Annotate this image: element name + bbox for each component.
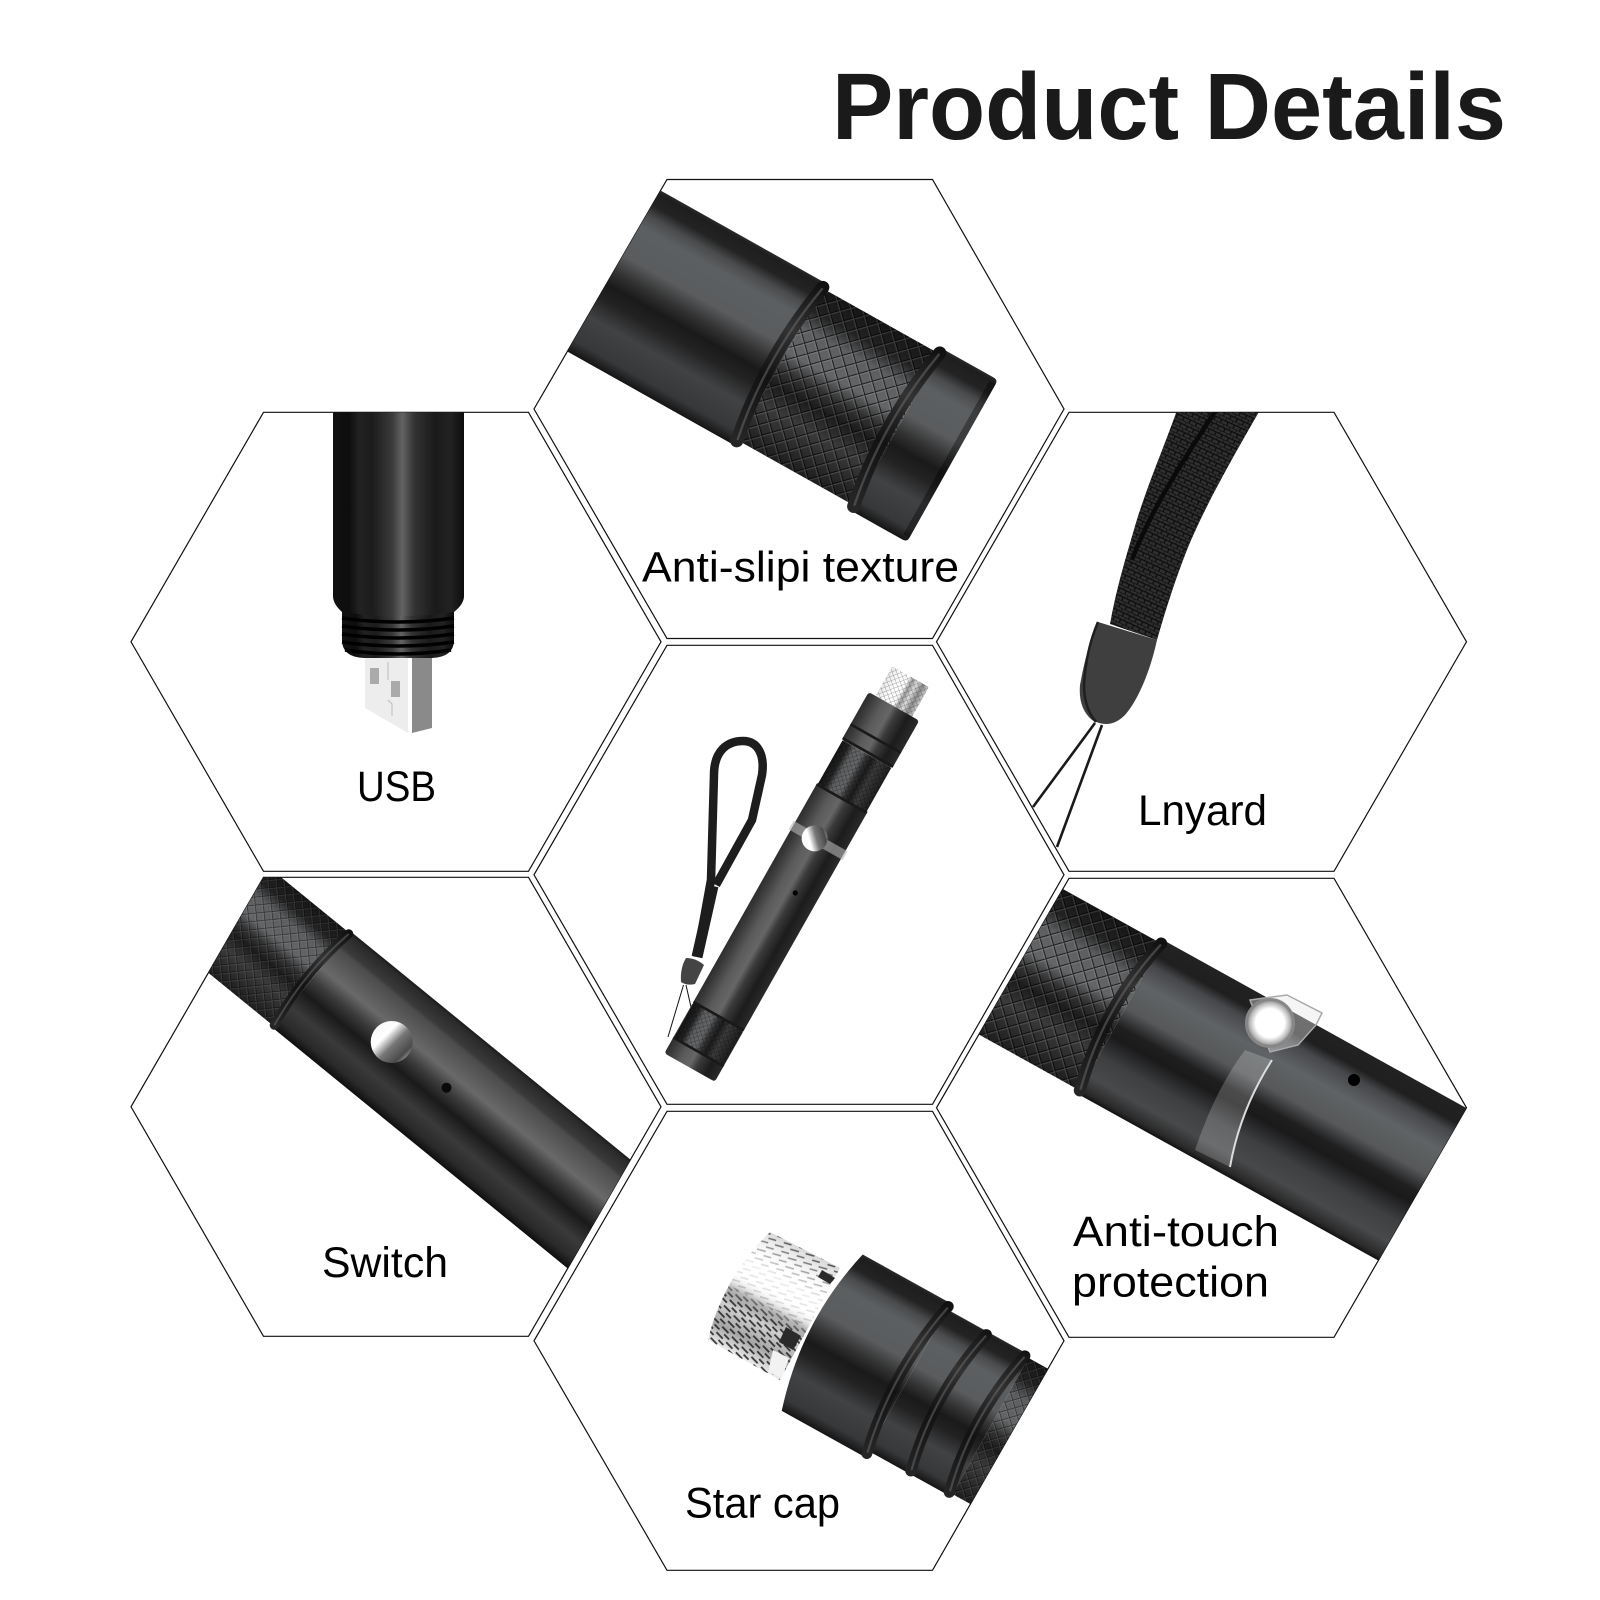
- label: anti-touch: Anti-touch: [1073, 1208, 1279, 1256]
- silver knurled cap: [708, 1232, 840, 1380]
- panel: lanyard: [936, 410, 1466, 871]
- panel: star cap: [533, 1110, 1065, 1571]
- hexagon outline: USB: [131, 412, 661, 871]
- title: Product Details: [832, 54, 1506, 160]
- panel: anti-slip texture: [533, 178, 1065, 640]
- icon: lanyard strap: [1033, 410, 1260, 847]
- label: protection: protection: [1072, 1258, 1269, 1306]
- hexagon outline: anti-touch: [936, 878, 1466, 1337]
- icon: indicator hole: [442, 1083, 452, 1093]
- hexagon outline: switch: [131, 877, 661, 1336]
- icon: switch button: [371, 1021, 413, 1063]
- hexagon outline: star cap: [534, 1111, 1064, 1570]
- icon: knurled pen barrel: [568, 190, 996, 540]
- icon: barrel with clip: [979, 889, 1466, 1260]
- label: USB: USB: [357, 763, 436, 811]
- icon: wrist strap: [668, 741, 763, 1037]
- panel: full laser pen: [534, 645, 1064, 1104]
- icon: transparent safety clip: [1195, 995, 1322, 1167]
- label: star cap: Star cap: [685, 1480, 840, 1528]
- icon: USB connector: [333, 410, 464, 733]
- icon: laser pen: [663, 661, 938, 1083]
- panel: USB: [131, 410, 661, 871]
- label: switch: Switch: [322, 1239, 448, 1287]
- icon: indicator hole: [1348, 1074, 1360, 1086]
- icon: star cap head: [708, 1232, 1048, 1504]
- panel: switch: [130, 876, 662, 1337]
- icon: switch barrel: [208, 877, 630, 1268]
- panel: anti-touch protection: [936, 878, 1468, 1338]
- label: lanyard: Lnyard: [1138, 787, 1267, 835]
- hexagon outline: anti-slip: [534, 180, 1064, 638]
- hexagon outline: center: [534, 645, 1064, 1104]
- label: anti-slip: Anti-slipi texture: [642, 544, 959, 592]
- hexagon outline: lanyard: [936, 412, 1466, 871]
